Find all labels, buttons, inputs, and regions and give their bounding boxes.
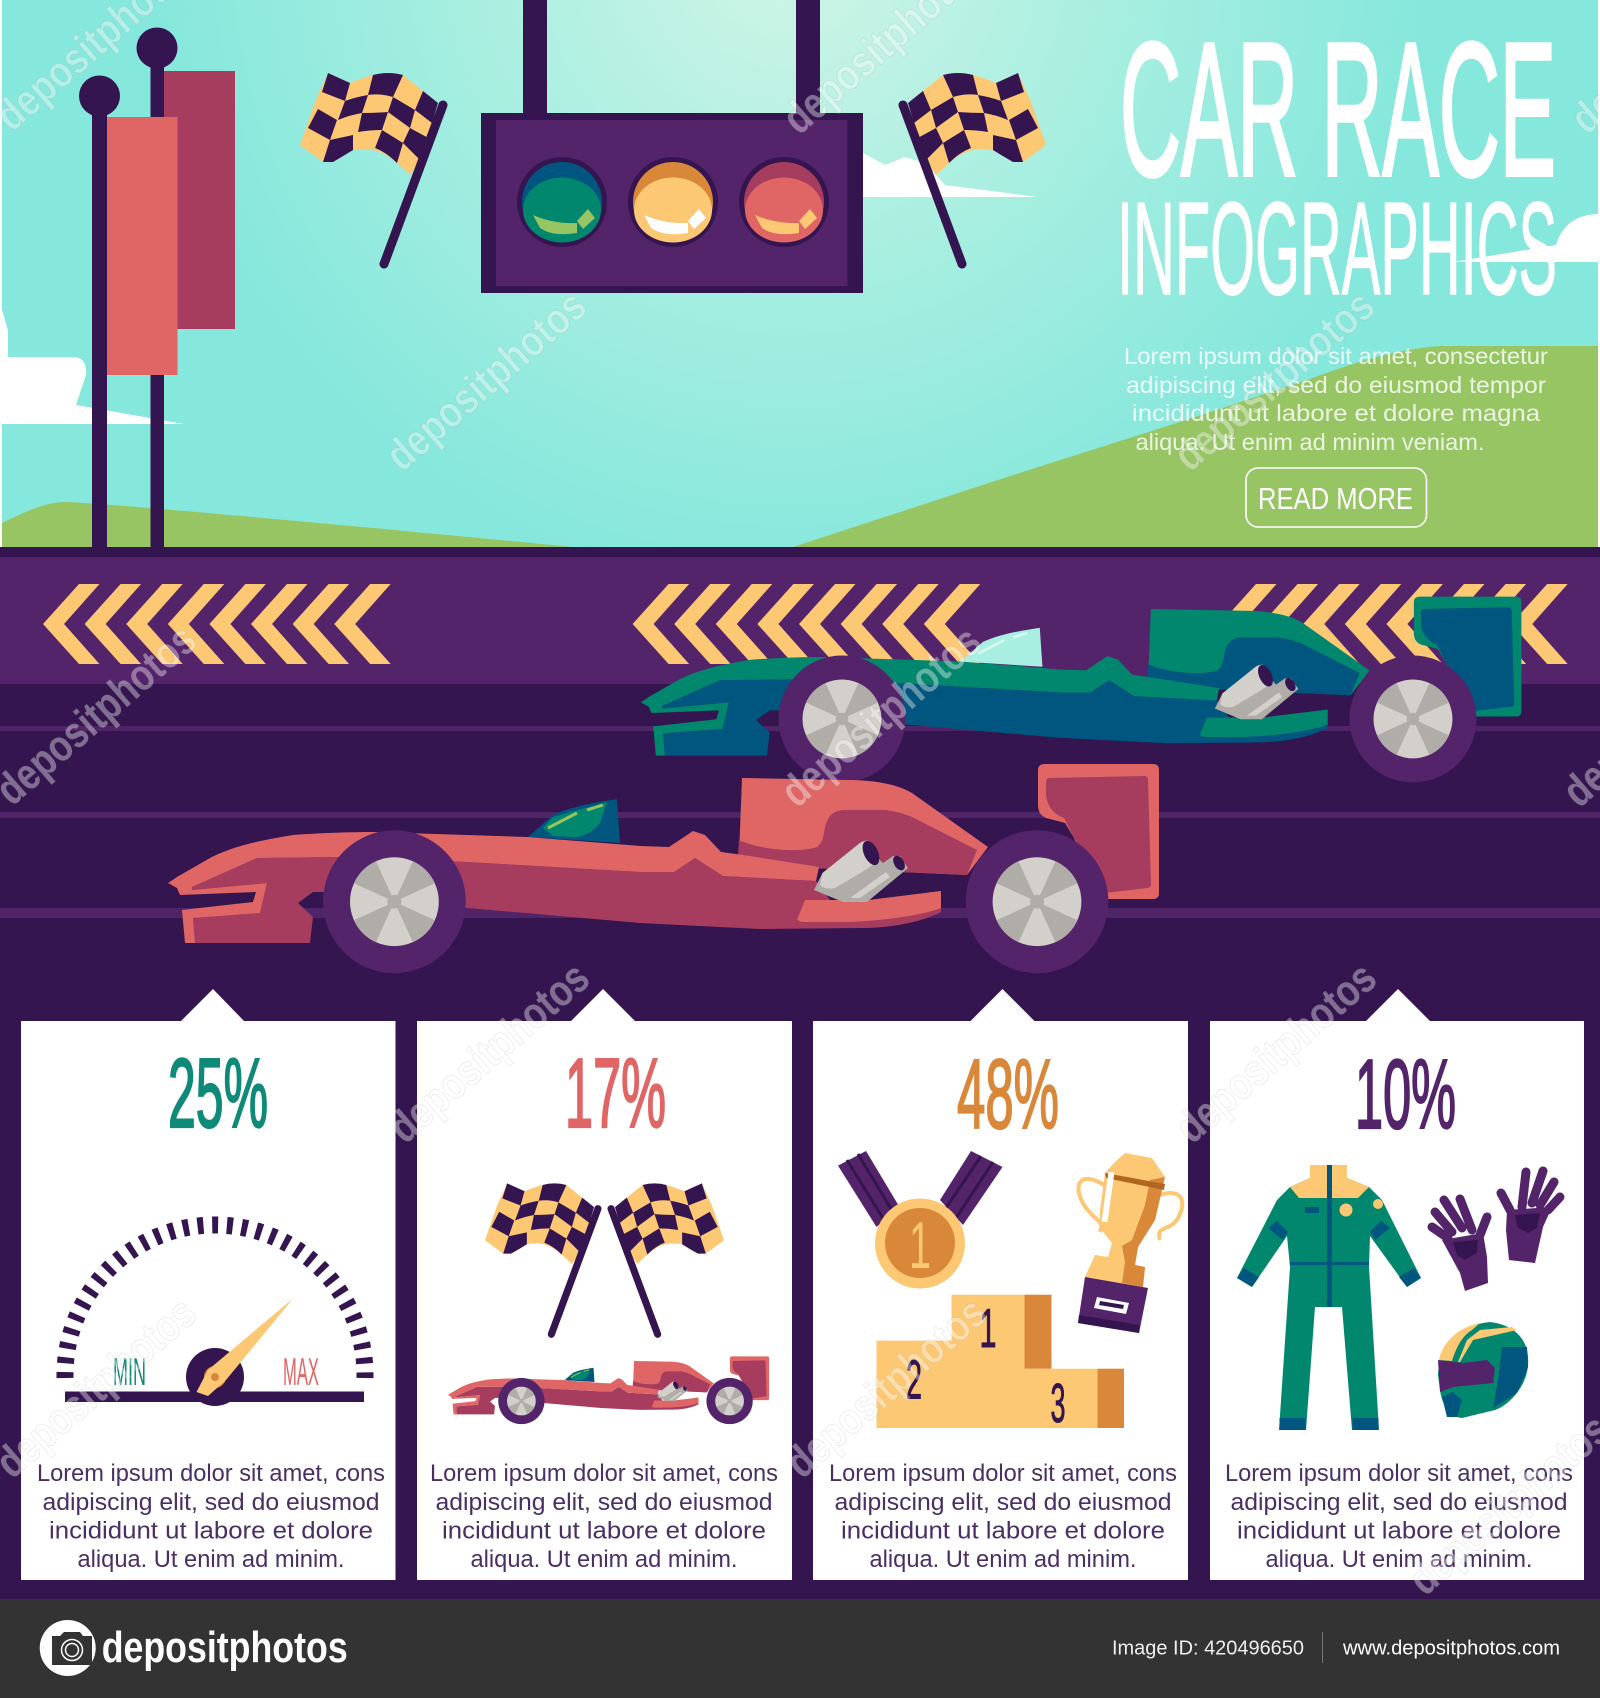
- icon: checkered flag right: [903, 73, 1046, 264]
- panel 2 text: [430, 1460, 778, 1573]
- watermarks: depositphotos: [376, 281, 596, 481]
- header paragraph: Lorem ipsum dolor sit amet, consectetur: [1124, 343, 1548, 369]
- sky background: [2, 0, 1598, 548]
- panel 4 text: Lorem ipsum dolor sit amet, cons: [1225, 1460, 1573, 1487]
- footer bar: [0, 1599, 1600, 1698]
- panel 2 text: incididunt ut labore et dolore: [442, 1518, 766, 1544]
- icon: helmet: [1438, 1322, 1528, 1418]
- panel 3 text: aliqua. Ut enim ad minim.: [870, 1546, 1136, 1573]
- watermarks: depositphotos: [379, 953, 599, 1153]
- watermarks: depositphotos: [776, 1288, 996, 1488]
- icon: camera logo: [40, 1620, 96, 1676]
- chevrons: middle group: [633, 584, 980, 664]
- icon: small race car: [448, 1356, 769, 1424]
- panel 4 text: aliqua. Ut enim ad minim.: [1266, 1546, 1532, 1573]
- speedometer gauge: MAX: [283, 1351, 319, 1394]
- icon: trophy: [1078, 1153, 1182, 1333]
- panel 1 text: aliqua. Ut enim ad minim.: [78, 1546, 344, 1573]
- icon: podium: 1: [980, 1297, 996, 1359]
- red race car: [168, 764, 1159, 973]
- image id: Image ID: 420496650: [1112, 1638, 1304, 1660]
- percent 17: 17%: [565, 1038, 666, 1148]
- icon: racing suit: [1237, 1165, 1421, 1430]
- icon: podium: 3: [1050, 1372, 1066, 1434]
- chevrons: left group: [43, 584, 391, 664]
- flags on poles: [79, 28, 235, 553]
- green race car: [641, 597, 1521, 782]
- hill: right: [790, 346, 1598, 548]
- cloud: left: [2, 310, 184, 424]
- footer logo wordmark: depositphotos: [102, 1623, 348, 1672]
- read more button: READ MORE: [1258, 481, 1413, 516]
- chevrons: right group: [1220, 584, 1568, 664]
- panel 1 text: Lorem ipsum dolor sit amet, cons: [37, 1460, 385, 1487]
- icon: medal: 1: [909, 1208, 931, 1282]
- panel 2 text: aliqua. Ut enim ad minim.: [470, 1546, 738, 1573]
- panel 3 text: adipiscing elit, sed do eiusmod: [834, 1489, 1172, 1516]
- icon: podium: [876, 1295, 1124, 1434]
- panel: speed: [21, 989, 396, 1580]
- panel 3 text: Lorem ipsum dolor sit amet, cons: [829, 1460, 1177, 1487]
- panel 1 text: adipiscing elit, sed do eiusmod: [42, 1489, 380, 1516]
- race track: [0, 547, 1600, 1600]
- icon: right glove: [1501, 1171, 1560, 1263]
- icon: crossed flag left: [485, 1183, 598, 1334]
- panel: flags and car: [417, 989, 792, 1580]
- panel 4 text: adipiscing elit, sed do eiusmod: [1230, 1489, 1568, 1516]
- icon: left glove: [1432, 1199, 1488, 1291]
- icon: crossed flag right: [611, 1183, 724, 1334]
- traffic light: [481, 0, 863, 293]
- panel 2 text: adipiscing elit, sed do eiusmod: [436, 1489, 772, 1516]
- header paragraph: adipiscing elit, sed do eiusmod tempor: [1126, 372, 1546, 398]
- panel: trophies: [813, 989, 1188, 1580]
- header paragraph: aliqua. Ut enim ad minim veniam.: [1136, 429, 1484, 455]
- header paragraph: [1124, 343, 1548, 455]
- panel 1 text: incididunt ut labore et dolore: [49, 1518, 373, 1544]
- percent 10: 10%: [1355, 1039, 1456, 1149]
- icon: podium: 2: [906, 1348, 922, 1410]
- cloud: right: [1453, 214, 1598, 262]
- panel 2 text: Lorem ipsum dolor sit amet, cons: [430, 1460, 778, 1487]
- watermarks: depositphotos: [1164, 281, 1384, 481]
- header paragraph: incididunt ut labore et dolore magna: [1132, 400, 1540, 426]
- panel 3 text: [829, 1460, 1177, 1573]
- speedometer gauge: MIN: [113, 1351, 146, 1394]
- watermarks: depositphotos: [1166, 953, 1386, 1153]
- panel 4 text: incididunt ut labore et dolore: [1237, 1518, 1561, 1544]
- watermarks: depositphotos: [771, 617, 991, 817]
- panel 1 text: [37, 1460, 385, 1573]
- title: [1117, 4, 1557, 322]
- panel 4 text: [1225, 1460, 1573, 1573]
- percent 25: 25%: [168, 1038, 268, 1148]
- icon: medal: [838, 1151, 1002, 1288]
- panel 3 text: incididunt ut labore et dolore: [841, 1518, 1165, 1544]
- panel: racing gear: [1210, 989, 1584, 1580]
- cloud: middle: [863, 153, 1037, 197]
- hill: left: [2, 502, 582, 548]
- website: www.depositphotos.com: [1342, 1638, 1560, 1660]
- icon: checkered flag left: [300, 73, 443, 264]
- speedometer gauge: [65, 1225, 365, 1406]
- percent 48: 48%: [957, 1039, 1059, 1149]
- read more button: [1246, 468, 1426, 527]
